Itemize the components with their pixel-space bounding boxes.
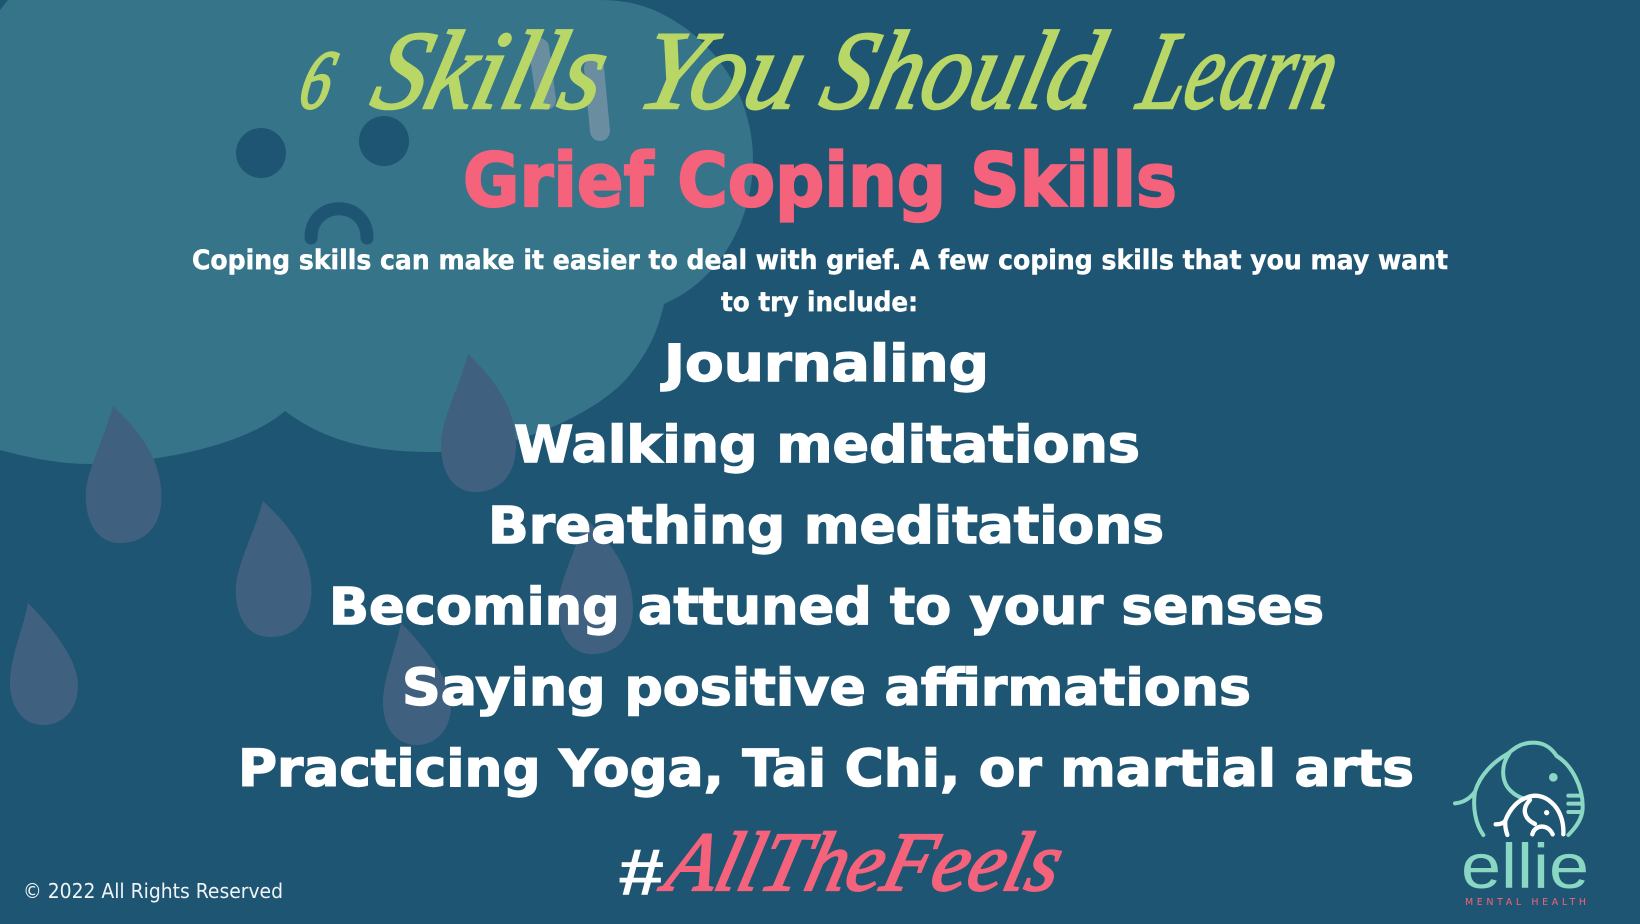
raindrop 3 — [236, 501, 311, 637]
skill: Becoming attuned to your senses: Becoming attuned to your senses — [329, 578, 1324, 637]
raindrop 4 — [10, 603, 78, 725]
skill: Walking meditations: Walking meditations — [514, 416, 1140, 475]
cloud body — [0, 0, 753, 464]
list of coping skills — [238, 335, 1414, 799]
cloud left eye — [236, 128, 286, 178]
skill: Journaling: Journaling — [661, 335, 989, 394]
baby elephant eye — [1544, 810, 1549, 815]
raindrop 5 — [558, 518, 633, 654]
first tear — [539, 48, 546, 100]
logo tagline: mental health: MENTAL HEALTH — [1465, 897, 1586, 908]
intro line 2: to try include: — [721, 287, 918, 318]
skill: Breathing meditations: Breathing meditations — [488, 497, 1164, 556]
title word: Should: Should — [811, 9, 1117, 133]
subtitle: Grief Coping Skills: Grief Coping Skills — [463, 138, 1177, 224]
hash symbol: # — [617, 835, 663, 909]
logo wordmark: ellie: ellie — [1461, 832, 1589, 902]
copyright: © 2022 All Rights Reserved — [23, 879, 283, 903]
raindrop 6 — [383, 623, 451, 745]
cloud right eye — [359, 116, 409, 166]
raindrop 2 — [441, 354, 516, 492]
skill: Practicing Yoga, Tai Chi, or martial arts: Practicing Yoga, Tai Chi, or martial arts — [238, 740, 1414, 799]
intro line 1: Coping skills can make it easier to deal with grief. A few coping skills that you may want — [192, 245, 1448, 276]
mother elephant eye — [1549, 773, 1558, 782]
title word: You: You — [628, 9, 819, 133]
hashtag words: AllTheFeels: AllTheFeels — [653, 816, 1072, 909]
cloud frown — [311, 209, 367, 238]
intro paragraph — [192, 245, 1448, 318]
second tear — [594, 68, 600, 131]
title word: Skills: Skills — [362, 9, 621, 133]
skill: Saying positive affirmations: Saying positive affirmations — [402, 659, 1251, 718]
illustration: sad rain cloud — [0, 0, 753, 745]
mother elephant outline — [1455, 743, 1583, 835]
icon: mother and baby elephant — [1455, 743, 1583, 835]
raindrop 1 — [86, 406, 161, 543]
title word: Learn: Learn — [1127, 9, 1352, 133]
baby elephant outline — [1496, 796, 1563, 835]
title word: 6: 6 — [291, 34, 345, 127]
hashtag — [617, 816, 1072, 909]
logo: ellie mental health — [1455, 743, 1589, 908]
title: 6 Skills You Should Learn — [291, 9, 1352, 133]
